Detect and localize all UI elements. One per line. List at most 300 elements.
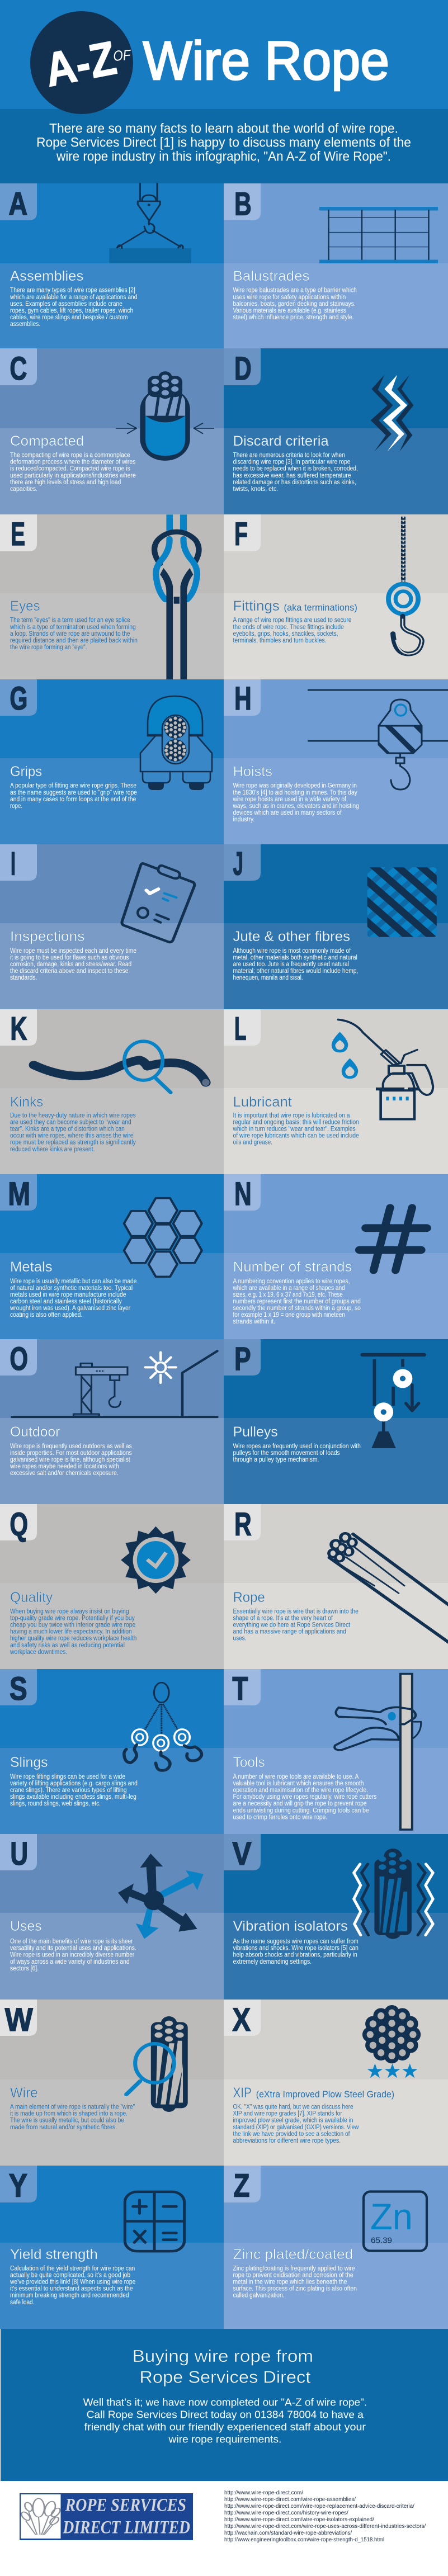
source links: http://www.wire-rope-direct.com/wire-rope-assemblies/ <box>224 2496 356 2503</box>
body text: Wire rope lifting slings can be used for a wide <box>10 1774 125 1780</box>
body text: A number of wire rope tools are available to use. A <box>233 1774 359 1780</box>
letter tab Y: Y <box>9 2167 27 2204</box>
body text <box>10 1443 132 1477</box>
body text: higher quality wire rope reduces workplace health <box>10 1636 136 1642</box>
logo: Rope Services Direct Limited: ROPE SERVICES <box>65 2495 186 2516</box>
body text: wrought iron was used). A galvanised zinc layer <box>10 1305 130 1312</box>
body text: ways, such as in cranes, elevators and in hoisting <box>233 803 359 810</box>
source links: http://www.wire-rope-direct.com/wire-rope-replacement-advice-discard-criteria/ <box>224 2503 414 2509</box>
body text: The term "eyes" is a term used for an eye splice <box>10 617 130 624</box>
letter tab F: F <box>234 516 248 552</box>
heading: Fittings <box>233 598 280 614</box>
body text: of natural and/or synthetic materials too. Typical <box>10 1285 133 1292</box>
letter tab X: X <box>232 2002 251 2038</box>
letter tab K: K <box>10 1011 27 1047</box>
body text <box>10 948 136 981</box>
body text: ends untwisting during cutting. Crimping tools can be <box>233 1807 369 1814</box>
letter tab R: R <box>234 1506 252 1543</box>
body text: made from natural and/or synthetic fibres. <box>10 2124 117 2131</box>
title badge: A-Z of <box>30 11 133 114</box>
body text: and in many cases to form loops at the end of the <box>10 796 136 803</box>
letter tab H: H <box>234 680 252 717</box>
letter tab W: W <box>5 2002 33 2038</box>
body text: It is important that wire rope is lubricated on a <box>233 1113 350 1119</box>
panel: S Slings <box>0 1669 224 1834</box>
body text: rope. <box>10 803 22 810</box>
panel: T Tools <box>224 1669 448 1834</box>
heading: Kinks <box>10 1094 43 1110</box>
panel: H Hoists <box>224 679 448 844</box>
letter tab X <box>224 2000 261 2038</box>
body text: variety of lifting applications (e.g. cargo slings and <box>10 1780 138 1787</box>
body text: A main element of wire rope is naturally the "wire" <box>10 2104 135 2111</box>
panel: O Outdoor <box>0 1339 224 1504</box>
body text: standards. <box>10 975 37 981</box>
icon: oil can with drops <box>332 1019 433 1119</box>
body text: The wire is usually metallic, but could also be <box>10 2117 124 2124</box>
body text <box>10 1608 136 1656</box>
letter tab G <box>0 679 37 717</box>
closing text: friendly chat with our friendly experienced staff about your <box>84 2421 366 2433</box>
body text: reduced where kinks are present. <box>10 1146 95 1153</box>
body text: Wire rope is usually metallic but can also be made <box>10 1278 136 1285</box>
body text: the wire rope forming an "eye". <box>10 644 87 651</box>
body text <box>233 1278 361 1325</box>
source links: http://www.engineeringtoolbox.com/wire-rope-strength-d_1518.html <box>224 2536 384 2543</box>
letter tab E: E <box>11 516 25 552</box>
logo icon: rope slings <box>20 2498 62 2535</box>
body text <box>10 2266 135 2306</box>
body text: standard (XIP) or galvanised (GXIP) versions. View <box>233 2124 359 2131</box>
body text <box>10 452 136 493</box>
body text <box>233 2266 357 2299</box>
heading: Uses <box>10 1918 42 1934</box>
body text: which is a type of termination used when forming <box>10 624 136 631</box>
body text <box>233 2104 359 2144</box>
icon: wire rope grip <box>140 696 212 790</box>
icon: kinked rope under magnifier <box>34 1041 210 1093</box>
body text: of ways across a wide variety of industries and <box>10 1959 130 1965</box>
closing text <box>83 2397 367 2445</box>
body text: regular and ongoing basis; this will reduce friction <box>233 1119 359 1126</box>
body text: actually be quite complicated, so it's a good job <box>10 2272 130 2279</box>
heading: Outdoor <box>10 1424 60 1440</box>
heading: Tools <box>233 1755 265 1770</box>
intro text: wire rope industry in this infographic, "An A-Z of Wire Rope". <box>56 149 391 164</box>
body text: metals used in wire rope manufacture include <box>10 1292 126 1298</box>
letter tab J: J <box>233 845 243 882</box>
body text: are a necessity and will grip the rope to prevent rope <box>233 1800 367 1807</box>
intro text: Rope Services Direct [1] is happy to discuss many elements of the <box>36 135 411 150</box>
body text: capacities. <box>10 486 37 493</box>
body text: surface. This process of zinc plating is also often <box>233 2286 357 2293</box>
body text: galvanised wire rope is fine, although specialist <box>10 1457 130 1463</box>
panel: M Metals <box>0 1174 224 1339</box>
body text: used particularly in applications/industries where <box>10 472 136 479</box>
letter tab I: I <box>11 845 16 882</box>
letter tab B: B <box>234 186 252 223</box>
body text: uses wire rope for safety applications within <box>233 294 346 301</box>
body text: One of the main benefits of wire rope is its sheer <box>10 1939 133 1945</box>
heading: Discard criteria <box>233 433 329 449</box>
body text: henequen, manila and sisal. <box>233 975 303 981</box>
letter tab C <box>0 348 37 387</box>
body text: of wire rope lubricants which can be used include <box>233 1133 359 1140</box>
body text: related damage or has distortions such as kinks, <box>233 479 356 486</box>
body text: tear". Kinks are a type of distortion which can <box>10 1126 125 1133</box>
body text: sizes, e.g. 1 x 19, 6 x 37 and 7x19, etc. These <box>233 1292 343 1298</box>
panel: C Compacted <box>0 348 224 514</box>
body text <box>10 783 137 810</box>
icon: calculator <box>125 2192 185 2251</box>
heading: Compacted <box>10 433 84 449</box>
body text: wire ropes maybe needed in locations with <box>10 1463 119 1470</box>
body text: required distance and then are plaited back within <box>10 637 138 644</box>
body text: eyebolts, grips, hooks, shackles, sockets, <box>233 631 338 637</box>
body text <box>10 1774 138 1807</box>
heading: Jute & other fibres <box>233 929 350 944</box>
body text <box>10 2104 135 2131</box>
title: Wire Rope: Wire Rope <box>143 30 389 91</box>
body text: abbreviations for different wire rope types. <box>233 2138 341 2144</box>
body text: A range of wire rope fittings are used to secure <box>233 617 351 624</box>
heading: Slings <box>10 1755 48 1770</box>
panel: K Kinks <box>0 1009 224 1174</box>
heading: Metals <box>10 1259 53 1275</box>
body text: safe load. <box>10 2299 34 2306</box>
letter tab U: U <box>10 1836 28 1872</box>
body text: which in turn reduces "wear and tear". Examples <box>233 1126 356 1133</box>
body text <box>10 617 138 651</box>
letter tab G: G <box>10 680 27 717</box>
icon: pulley system <box>362 1355 424 1448</box>
body text: material; other natural fibres would include hemp, <box>233 968 358 975</box>
panel: G Grips <box>0 679 224 844</box>
body text: the ends of wire rope. These fittings include <box>233 624 344 631</box>
body text: Wire rope is frequently used outdoors as well as <box>10 1443 132 1450</box>
panel: Z Zinc plated/coated <box>224 2166 448 2329</box>
letter tab C: C <box>10 351 27 387</box>
panel: E Eyes <box>0 514 224 680</box>
header banner <box>0 0 448 183</box>
body text: XIP and wire rope grades [7]. XIP stands for <box>233 2111 342 2117</box>
body text: devices which are used in many sectors of <box>233 810 342 816</box>
body text: numbers represent first the number of groups and <box>233 1298 361 1305</box>
icon: zinc periodic table tile <box>364 2192 427 2251</box>
icon: multi-directional arrows <box>118 1854 204 1939</box>
logo: Rope Services Direct Limited <box>20 2493 193 2540</box>
body text: Wire rope must be inspected each and every time <box>10 948 136 954</box>
closing panel: buying wire rope <box>1 2329 448 2481</box>
closing heading: Rope Services Direct <box>139 2367 311 2386</box>
body text <box>233 287 357 321</box>
closing heading <box>133 2346 313 2386</box>
body text: discarding wire rope [3]. In particular wire rope <box>233 459 350 466</box>
body text: valuable tool is lubricant which ensures the smooth <box>233 1780 364 1787</box>
body text: inside properties. For most outdoor applications <box>10 1450 132 1457</box>
body text: metal, other materials both synthetic and natural <box>233 954 357 961</box>
intro text: There are so many facts to learn about the world of wire rope. <box>49 121 398 136</box>
body text <box>233 617 351 644</box>
icon: wire strands under magnifier <box>126 2016 188 2112</box>
body text: shape of a rope. It's at the very heart of <box>233 1615 333 1622</box>
panel: U Uses <box>0 1834 224 2000</box>
body text <box>10 1278 136 1318</box>
body text: Various materials are available (e.g. stainless <box>233 308 346 314</box>
letter tab P: P <box>234 1341 251 1377</box>
heading: Quality <box>10 1590 53 1605</box>
body text: Essentially wire rope is wire that is drawn into the <box>233 1608 359 1615</box>
panel: L Lubricant <box>224 1009 448 1174</box>
body text <box>233 1608 359 1642</box>
body text: rope to prevent oxidisation and corrosion of the <box>233 2272 353 2279</box>
body text: Wire ropes are frequently used in conjunction with <box>233 1443 361 1450</box>
letter tab M <box>0 1174 37 1212</box>
body text: versatility and its potential uses and applications. <box>10 1945 136 1952</box>
letter tab O: O <box>10 1341 28 1377</box>
source links: http://www.wire-rope-direct.com/wire-rope-uses-across-different-industries-sectors/ <box>224 2523 426 2530</box>
heading: Grips <box>10 764 42 779</box>
body text: and has a massive range of applications and <box>233 1629 346 1636</box>
body text: workplace downtimes. <box>10 1649 67 1656</box>
body text <box>233 1774 377 1821</box>
body text: crane slings). There are various types of lifting <box>10 1787 126 1794</box>
source links: http://www.wire-rope-direct.com/history-wire-ropes/ <box>224 2509 348 2516</box>
letter tab D <box>224 348 261 387</box>
body text: For anybody using wire ropes regularly, wire rope cutters <box>233 1794 377 1800</box>
icon: crimping tool on rope <box>334 1674 421 1830</box>
heading note: aka terminations: (aka terminations) <box>284 602 357 613</box>
body text: wire rope hoists are used in a wide variety of <box>233 796 347 803</box>
panel: P Pulleys <box>224 1339 448 1504</box>
letter tab Z: Z <box>234 2167 249 2204</box>
icon: wire cross-section and stars <box>362 2005 421 2078</box>
heading: Balustrades <box>233 268 310 284</box>
body text: and safety risks as well as reducing potential <box>10 1642 125 1649</box>
letter tab P <box>224 1339 261 1377</box>
panel: N Number of strands <box>224 1174 448 1339</box>
body text: there are high levels of stress and high load <box>10 479 121 486</box>
body text: is reduced/compacted. Compacted wire rope is <box>10 466 130 472</box>
heading note: extra improved plow steel grade: (eXtra Improved Plow Steel Grade) <box>256 2089 394 2100</box>
body text: deformation process where the diameter of wires <box>10 459 136 466</box>
letter tab V <box>224 1834 261 1872</box>
letter tab J <box>224 844 261 882</box>
body text: are used they can become subject to "wear and <box>10 1119 131 1126</box>
panel: Y Yield strength <box>0 2166 224 2329</box>
letter tab F <box>224 514 261 552</box>
icon: zinc periodic table tile: Zn <box>370 2196 413 2237</box>
heading: Number of strands <box>233 1259 352 1275</box>
body text: balconies, boats, garden decking and stairways. <box>233 301 356 308</box>
icon: balustrade <box>319 207 438 263</box>
body text: A numbering convention applies to wire ropes, <box>233 1278 350 1285</box>
source links: http://wachain.com/standard-wire-rope-abbreviations/ <box>224 2530 352 2536</box>
icon: woven fibres <box>367 867 437 937</box>
source links <box>224 2489 426 2543</box>
icon: hoist block <box>308 690 448 790</box>
body text: Calculation of the yield strength for wire rope can <box>10 2266 135 2272</box>
body text: excessive salt and/or chemicals exposure. <box>10 1470 119 1477</box>
body text: carbon steel and stainless steel (historically <box>10 1298 122 1305</box>
body text: having a much lower life expectancy. In addition <box>10 1629 132 1636</box>
panel: J Jute & other fibres <box>224 844 448 1009</box>
body text: as the name suggests are used to "grip" wire rope <box>10 790 137 796</box>
body text: rope must be replaced as strength is significantly <box>10 1140 136 1146</box>
heading: Inspections <box>10 929 84 944</box>
letter tab R <box>224 1504 261 1543</box>
icon: inspection clipboard <box>122 863 195 942</box>
heading: Pulleys <box>233 1424 278 1440</box>
body text: improved plow steel grade, which is available in <box>233 2117 353 2124</box>
body text: Although wire rope is most commonly made of <box>233 948 351 954</box>
body text: it is going to be used for flaws such as obvious <box>10 954 129 961</box>
panel: B Balustrades <box>224 183 448 348</box>
body text: industry. <box>233 816 254 823</box>
panel: I Inspections <box>0 844 224 1009</box>
body text: When buying wire rope always insist on buying <box>10 1608 129 1615</box>
body text: cheap you buy twice with inferior grade wire rope <box>10 1622 135 1629</box>
body text: occur with wire ropes, where this arises the wire <box>10 1133 134 1140</box>
letter tab B <box>224 183 261 223</box>
icon: outdoor crane, sun and building <box>12 1351 217 1417</box>
body text: Zinc plating/coating is frequently applied to wire <box>233 2266 355 2272</box>
heading: Hoists <box>233 764 272 779</box>
heading: Zinc plated/coated <box>233 2247 353 2262</box>
body text: we've provided this link! [8] When using wire rope <box>10 2279 135 2286</box>
source links: http://www.wire-rope-direct.com/ <box>224 2489 303 2496</box>
body text: steel) which influence price, strength and style. <box>233 314 354 321</box>
panel: F Fittings <box>224 514 448 679</box>
panel: X XIP <box>224 2000 448 2166</box>
body text: top-quality grade wire rope. Potentially if you buy <box>10 1615 135 1622</box>
letter tab T <box>224 1669 261 1707</box>
body text: Wire rope balustrades are a type of barrier which <box>233 287 357 294</box>
body text: which are available for a range of applications and <box>10 294 137 301</box>
closing text: Call Rope Services Direct today on 01384 78004 to have a <box>87 2409 364 2421</box>
letter tab M: M <box>8 1176 30 1212</box>
body text <box>233 452 358 493</box>
letter tab I <box>0 844 37 882</box>
closing text: Well that's it; we have now completed our "A-Z of wire rope". <box>83 2397 367 2408</box>
body text: slings, round slings, web slings, etc. <box>10 1800 101 1807</box>
letter tab U <box>0 1834 37 1872</box>
body text: used to crimp ferrules onto wire rope. <box>233 1814 327 1821</box>
heading: XIP <box>233 2085 252 2101</box>
body text: Due to the heavy-duty nature in which wire ropes <box>10 1113 136 1119</box>
letter tab D: D <box>234 351 252 387</box>
body text: cables, wire rope slings and bespoke / custom <box>10 314 128 321</box>
heading: Assemblies <box>10 268 83 284</box>
body text: has excessive wear, has suffered temperature <box>233 472 351 479</box>
body text: terminals, thimbles and turn buckles. <box>233 637 327 644</box>
body text <box>10 287 137 328</box>
body text: twists, knots, etc. <box>233 486 278 493</box>
letter tab L <box>224 1009 261 1047</box>
body text: a loop. Strands of wire rope are unwound to the <box>10 631 130 637</box>
panel: V Vibration isolators <box>224 1834 448 2000</box>
body text: everything we do here at Rope Services Direct <box>233 1622 351 1629</box>
icon: eye splice <box>154 514 199 680</box>
letter tab L: L <box>234 1011 246 1047</box>
body text <box>10 1939 136 1972</box>
letter tab Q: Q <box>10 1506 28 1543</box>
body text: As the name suggests wire ropes can suffer from <box>233 1939 359 1945</box>
logo: Rope Services Direct Limited: DIRECT LIMITED <box>63 2518 190 2538</box>
heading: Yield strength <box>10 2247 98 2262</box>
panel: R Rope <box>224 1504 448 1669</box>
letter tab O <box>0 1339 37 1377</box>
body text: operation and maximisation of the wire rope lifecycle. <box>233 1787 368 1794</box>
body text: metal in the wire rope which lies beneath the <box>233 2279 347 2286</box>
body text: corrosion, damage, kinks and stress/wear. Read <box>10 961 131 968</box>
body text <box>10 1113 136 1153</box>
body text: it is made up from which is shaped into a rope. <box>10 2111 128 2117</box>
body text: strands within it. <box>233 1318 275 1325</box>
body text: needs to be replaced when it is broken, corroded, <box>233 466 358 472</box>
body text <box>233 948 358 981</box>
icon: chain with hook fitting <box>388 517 422 654</box>
letter tab N <box>224 1174 261 1212</box>
body text: slings available including endless slings, multi-leg <box>10 1794 136 1800</box>
body text: Wire rope is used in an incredibly diverse number <box>10 1952 134 1959</box>
body text: uses. Examples of assemblies include crane <box>10 301 122 308</box>
body text: which are available in a range of shapes and <box>233 1285 345 1292</box>
letter tab N: N <box>234 1176 252 1212</box>
body text: through a pulley type mechanism. <box>233 1457 319 1463</box>
letter tab Z <box>224 2166 261 2204</box>
letter tab Y <box>0 2166 37 2204</box>
body text: There are many types of wire rope assemblies [2] <box>10 287 135 294</box>
body text: the discard criteria above and inspect to these <box>10 968 129 975</box>
body text: A popular type of fitting are wire rope grips. These <box>10 783 136 790</box>
body text: pulleys for the smooth movement of loads <box>233 1450 340 1457</box>
body text: secondly the number of strands within a group, so <box>233 1305 361 1312</box>
closing text: wire rope requirements. <box>168 2433 281 2445</box>
letter tab E <box>0 514 37 552</box>
letter tab H <box>224 679 261 717</box>
letter tab S: S <box>10 1671 27 1707</box>
body text: coating is also often applied. <box>10 1312 82 1318</box>
body text: for example 1 x 19 = one group with nineteen <box>233 1312 345 1318</box>
body text: minimum breaking strength and recommended <box>10 2293 129 2299</box>
body text: extremely demanding settings. <box>233 1959 312 1965</box>
icon: quality badge <box>121 1526 191 1594</box>
body text: oils and grease. <box>233 1140 272 1146</box>
icon: crane hook with load <box>109 183 191 263</box>
icon: compacted wire rope with arrows <box>116 371 214 461</box>
body text: the 1830's [4] to aid hoisting in mines. To this day <box>233 790 357 796</box>
icon: rope strands <box>327 1532 448 1642</box>
panel: Q Quality <box>0 1504 224 1669</box>
source links: http://www.wire-rope-direct.com/wire-rope-isolators-explained/ <box>224 2516 374 2523</box>
body text: There are numerous criteria to look for when <box>233 452 345 459</box>
body text: uses. <box>233 1636 246 1642</box>
body text: help absorb shocks and vibrations, particularly in <box>233 1952 357 1959</box>
icon: broken wire zigzag <box>371 375 413 451</box>
body text: The compacting of wire rope is a commonplace <box>10 452 130 459</box>
letter tab S <box>0 1669 37 1707</box>
body text: assemblies. <box>10 321 40 328</box>
heading: Lubricant <box>233 1094 292 1110</box>
letter tab K <box>0 1009 37 1047</box>
body text: it's essential to understand aspects such as the <box>10 2286 133 2293</box>
body text <box>233 1113 359 1146</box>
body text: the link we have provided to see a selection of <box>233 2131 350 2138</box>
icon: metal hexagons <box>124 1198 202 1277</box>
icon: hash symbol <box>360 1208 427 1270</box>
panel: W Wire <box>0 2000 224 2166</box>
